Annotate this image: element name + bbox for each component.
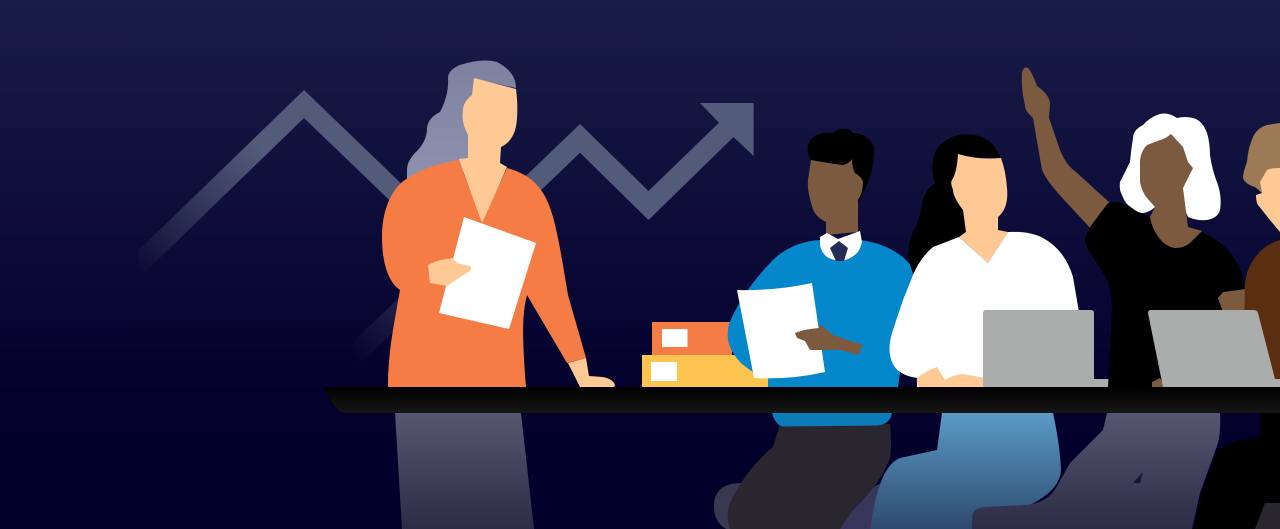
chair left xyxy=(714,483,760,529)
trousers xyxy=(728,424,891,529)
sweater xyxy=(728,240,914,387)
chair right xyxy=(840,483,885,529)
hand on table xyxy=(568,358,615,387)
face and neck xyxy=(951,154,1008,263)
laptop 1 xyxy=(983,310,1116,387)
sweater hem xyxy=(772,413,892,426)
orange dress xyxy=(382,160,586,387)
face and neck xyxy=(808,159,863,235)
collar xyxy=(820,231,862,261)
person 3: woman in white xyxy=(870,134,1082,529)
trousers xyxy=(1193,413,1280,529)
person 2: man in blue sweater xyxy=(728,129,914,529)
raised arm xyxy=(1022,68,1110,230)
white top xyxy=(890,232,1082,387)
paper xyxy=(439,217,536,329)
orange book xyxy=(652,322,732,356)
legs xyxy=(395,413,534,529)
trousers highlight xyxy=(1255,503,1280,529)
person 4: woman raising hand xyxy=(972,68,1246,529)
tie xyxy=(830,241,848,261)
trouser fold xyxy=(1133,472,1143,483)
face and neck xyxy=(459,78,517,225)
hair xyxy=(808,129,874,203)
face xyxy=(1256,168,1280,232)
yellow book xyxy=(642,355,768,387)
hair xyxy=(1243,123,1280,193)
hair xyxy=(407,61,516,184)
books xyxy=(642,322,768,387)
person 1: standing woman xyxy=(382,61,615,529)
hand xyxy=(1152,378,1165,387)
hand xyxy=(917,367,985,387)
trousers xyxy=(870,413,1061,529)
hair xyxy=(908,134,1000,274)
hand holding paper xyxy=(428,258,471,286)
trousers xyxy=(972,413,1220,529)
paper xyxy=(737,283,825,378)
black shirt xyxy=(1085,202,1245,387)
lower arm xyxy=(1218,289,1246,312)
arrow chart: trend line xyxy=(139,90,754,369)
brown shirt xyxy=(1244,240,1280,387)
laptop 2 xyxy=(1148,310,1280,387)
person 5: man at right edge xyxy=(1193,123,1280,529)
white hair xyxy=(1120,114,1221,220)
table xyxy=(324,387,1280,413)
face and neck xyxy=(1140,134,1202,248)
pointing hand xyxy=(795,324,863,355)
